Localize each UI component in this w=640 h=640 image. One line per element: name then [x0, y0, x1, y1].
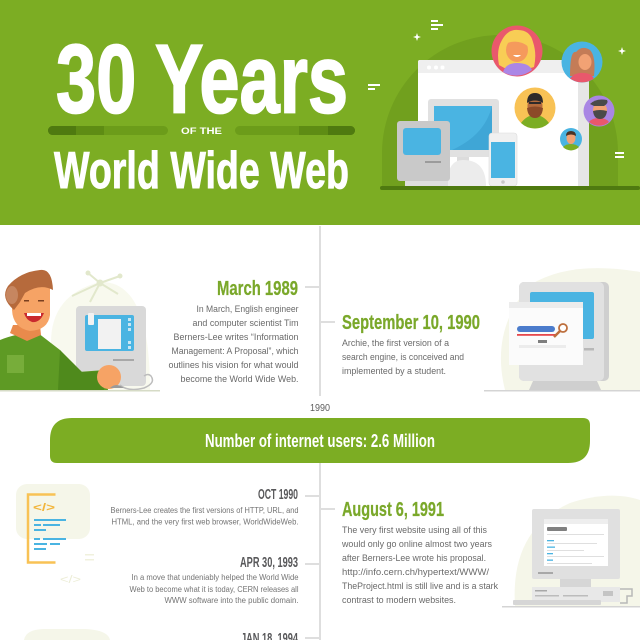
- milestone: Apr 30, 1993: In a move that undeniably helped the World Wide: [132, 573, 299, 582]
- avatar: bearded man: [514, 88, 556, 129]
- milestone: September 10, 1990: implemented by a student.: [342, 366, 446, 377]
- milestone: Apr 30, 1993: WWW software into the public domain.: [164, 596, 298, 605]
- title divider: left: [48, 126, 168, 135]
- milestone: Oct 1990: OCT 1990: [258, 487, 298, 503]
- milestone: Apr 30, 1993: APR 30, 1993: [240, 555, 298, 571]
- milestone: March 1989: March 1989: [217, 278, 298, 300]
- tick: March 1989: [305, 286, 320, 288]
- illustration: code document: </>: [60, 574, 81, 586]
- milestone: Oct 1990: [110, 487, 298, 526]
- illustration: Tim Berners-Lee at computer: [0, 270, 160, 392]
- title: 30 Years: 30 Years: [56, 24, 348, 134]
- milestone: September 10, 1990: search engine, is conceived and: [342, 352, 464, 363]
- milestone: August 6, 1991: would only go online almost two years: [341, 539, 492, 550]
- illustration: devices and people: [368, 20, 640, 190]
- milestone: September 10, 1990: [342, 312, 480, 377]
- illustration: code document: [16, 484, 94, 586]
- milestone: March 1989: outlines his vision for what would: [168, 360, 298, 371]
- milestone: March 1989: In March, English engineer: [196, 304, 299, 315]
- tick: September 1990: [320, 321, 335, 323]
- milestone: August 6, 1991: contrast to modern websites.: [342, 595, 456, 606]
- title: World Wide Web: World Wide Web: [54, 142, 349, 200]
- milestone: March 1989: Berners-Lee writes “Information: [174, 332, 298, 343]
- illustration: code document: </>: [33, 502, 55, 514]
- title: of the: OF THE: [181, 126, 222, 137]
- person: [0, 270, 124, 390]
- avatar: man with beanie: [584, 96, 614, 126]
- tick: Apr 1993: [305, 563, 320, 565]
- milestone: March 1989: become the World Wide Web.: [180, 374, 298, 385]
- illustration: search engine computer: [484, 268, 640, 392]
- banner: number of internet users: Number of internet users: 2.6 Million: [205, 431, 435, 451]
- tick: Jan 1994: [305, 637, 320, 639]
- tick: Oct 1990: [305, 495, 320, 497]
- icon: smartphone: [489, 133, 517, 186]
- milestone: Oct 1990: HTML, and the very first web browser, WorldWideWeb.: [112, 518, 298, 526]
- milestone: Apr 30, 1993: [130, 555, 299, 605]
- milestone: Apr 30, 1993: Web to become what it is today, CERN releases all: [130, 585, 299, 594]
- illustration: next milestone background: [24, 629, 110, 640]
- milestone: August 6, 1991: after Berners-Lee wrote his proposal.: [342, 553, 486, 564]
- milestone: August 6, 1991: TheProject.html is still live and is a stark: [342, 581, 498, 592]
- avatar: young man: [560, 128, 582, 150]
- timeline: lower spine: [319, 463, 321, 640]
- panel: header: [0, 0, 640, 225]
- timeline: upper spine: [319, 226, 321, 396]
- milestone: September 10, 1990: September 10, 1990: [342, 312, 480, 334]
- milestone: March 1989: [168, 278, 299, 385]
- illustration: early web computer: [502, 496, 640, 608]
- milestone: September 10, 1990: Archie, the first version of a: [342, 338, 450, 349]
- icon: desktop monitor: [428, 99, 499, 186]
- milestone: August 6, 1991: [341, 499, 498, 606]
- decorative marks: [368, 20, 626, 158]
- milestone: August 6, 1991: The very first website using all of this: [342, 525, 487, 536]
- milestone: August 6, 1991: August 6, 1991: [342, 499, 444, 521]
- milestone: Oct 1990: Berners-Lee creates the first versions of HTTP, URL, and: [110, 506, 298, 515]
- milestone: March 1989: Management: A Proposal”, which: [172, 346, 298, 357]
- avatar: red-haired woman: [562, 42, 602, 82]
- computer: [76, 306, 152, 389]
- banner: number of internet users: [50, 418, 590, 463]
- ground line: [380, 186, 640, 190]
- milestone: August 6, 1991: http://info.cern.ch/hypertext/WWW/: [342, 567, 489, 578]
- title divider: right: [235, 126, 355, 135]
- milestone: March 1989: and computer scientist Tim: [192, 318, 299, 329]
- avatar: blonde woman: [492, 26, 542, 76]
- tick: August 1991: [320, 508, 335, 510]
- icon: classic computer: [397, 121, 450, 187]
- year label: 1990: 1990: [310, 402, 330, 414]
